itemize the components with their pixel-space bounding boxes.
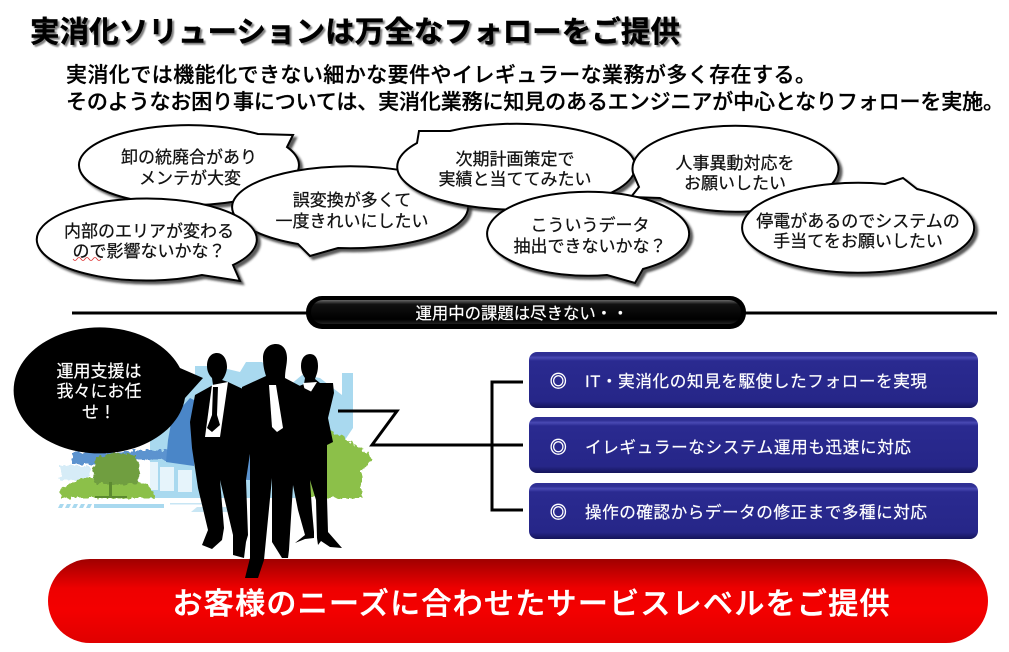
woman silhouette (285, 354, 342, 548)
feature box 3 (529, 483, 978, 539)
bubble: power outage: 停電があるのでシステムの (756, 212, 960, 231)
left man silhouette (190, 353, 252, 558)
red service level bar: お客様のニーズに合わせたサービスレベルをご提供 (172, 588, 890, 621)
bubble: wholesale consolidation (79, 125, 299, 205)
bubble: wholesale consolidation: メンテが大変 (139, 169, 241, 188)
feature box 2 (529, 417, 978, 473)
speech bubble: leave it to us: 我々にお任 (56, 382, 142, 401)
bubble: internal area change (37, 199, 257, 281)
feature box 2: ◎ (550, 438, 567, 457)
bubble: data extraction: 抽出できないかな？ (514, 237, 666, 256)
skyline (150, 362, 353, 498)
bubble: internal area change: 内部のエリアが変わる (64, 222, 234, 241)
speech bubble: leave it to us: 運用支援は (56, 362, 142, 381)
speech bubbles: operational issues (37, 124, 974, 283)
left tree crown (92, 452, 140, 484)
feature box 1 (529, 352, 978, 408)
feature box 3: ◎ (550, 503, 567, 522)
intro text (66, 64, 1004, 114)
bubble: personnel changes (631, 126, 838, 212)
bubble: power outage (742, 178, 974, 273)
red service level bar (48, 559, 988, 643)
banner: issues never end: 運用中の課題は尽きない・・ (415, 305, 629, 323)
bubble: next term plan: 次期計画策定で (456, 150, 574, 169)
silhouettes: three business people (190, 344, 342, 578)
bubble: conversion errors: 一度きれいにしたい (276, 212, 428, 231)
ground stripes (58, 504, 92, 508)
intro text: そのようなお困り事については、実消化業務に知見のあるエンジニアが中心となりフォローを実施。 (66, 91, 1004, 114)
right tree (305, 430, 372, 498)
bubble: next term plan (397, 124, 635, 210)
feature box 2: イレギュラーなシステム運用も迅速に対応 (585, 438, 911, 457)
feature box 3: 操作の確認からデータの修正まで多種に対応 (585, 502, 927, 522)
speech bubble: leave it to us (14, 327, 203, 453)
left bush (60, 478, 156, 498)
centre man silhouette (242, 344, 312, 578)
bubble: data extraction (487, 192, 689, 283)
bubble: wholesale consolidation: 卸の統廃合があり (121, 148, 257, 167)
bubble: conversion errors (232, 166, 468, 256)
connector bracket (338, 382, 523, 510)
bubble: personnel changes: お願いしたい (684, 174, 786, 193)
bubble: internal area change: ので影響ないかな？ (72, 242, 226, 261)
intro text: 実消化では機能化できない細かな要件やイレギュラーな業務が多く存在する。 (66, 64, 816, 87)
feature box 1: IT・実消化の知見を駆使したフォローを実現 (585, 372, 927, 391)
speech bubble: leave it to us: せ！ (82, 403, 116, 422)
city illustration background (58, 362, 372, 512)
bubble: next term plan: 実績と当ててみたい (438, 170, 592, 189)
bubble: conversion errors: 誤変換が多くて (293, 191, 411, 210)
title: 実消化ソリューションは万全なフォローをご提供 (30, 15, 680, 49)
bubble: personnel changes: 人事異動対応を (676, 154, 794, 173)
bubble: data extraction: こういうデータ (530, 215, 650, 235)
bubble: power outage: 手当てをお願いしたい (773, 232, 943, 251)
banner: issues never end (306, 296, 746, 329)
feature box 1: ◎ (550, 372, 567, 391)
